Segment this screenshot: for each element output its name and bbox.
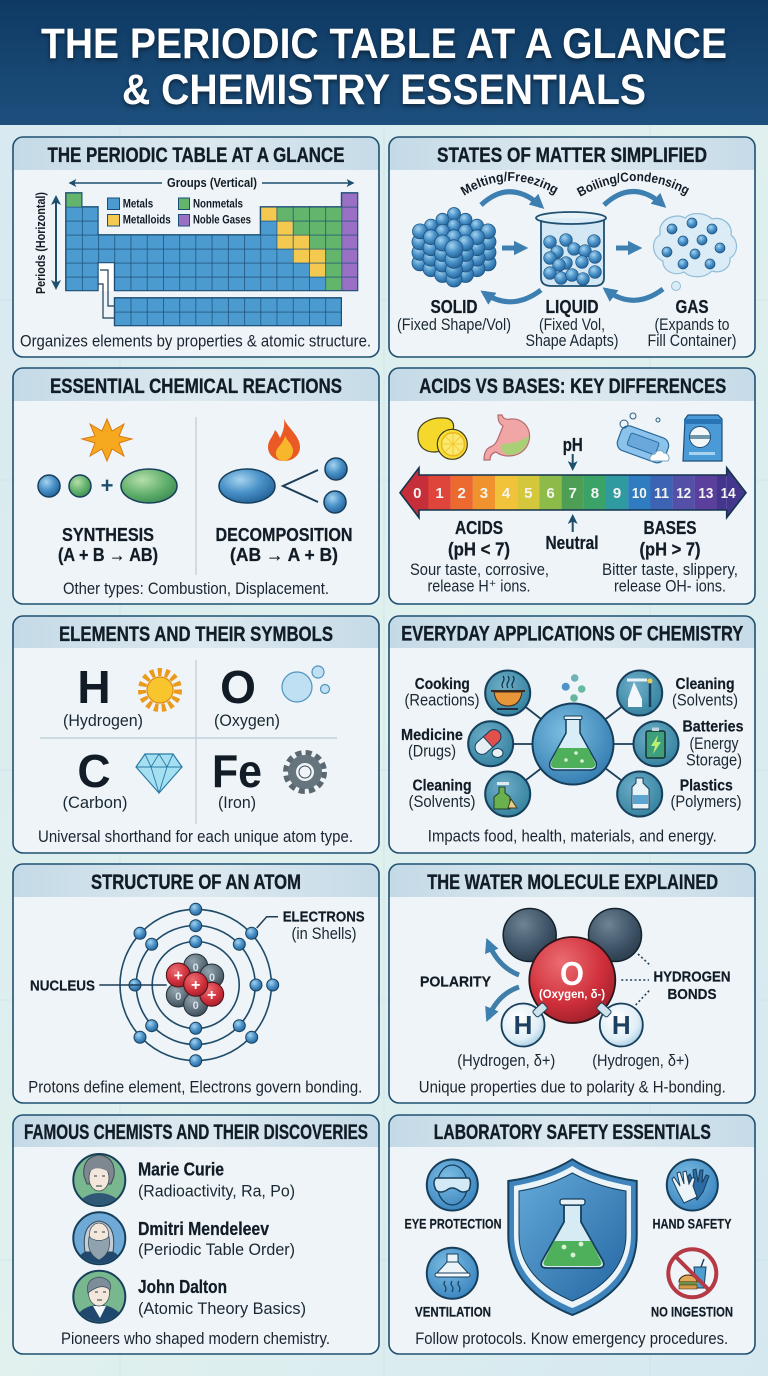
pH scale bar: 9	[613, 485, 621, 502]
left labels: Medicine	[401, 727, 463, 744]
curved process labels: Melting/Freezing	[460, 172, 558, 196]
water molecule diagram: H	[612, 1010, 631, 1040]
safety labels: VENTILATION	[415, 1304, 491, 1320]
groups axis label: Groups (Vertical)	[167, 175, 257, 190]
water molecule diagram	[502, 908, 643, 1046]
legend: Noble Gases	[193, 212, 251, 226]
synthesis label: SYNTHESIS	[62, 525, 154, 545]
acids text: (pH < 7)	[448, 540, 510, 560]
left labels: (Reactions)	[404, 692, 480, 710]
right labels: (Energy	[690, 735, 739, 753]
water molecule diagram: (Oxygen, δ-)	[539, 987, 605, 1001]
pH scale bar: 0	[413, 485, 421, 502]
icon: flame	[268, 419, 300, 461]
element: oxygen: O	[220, 661, 256, 713]
nucleus: +	[174, 968, 183, 984]
heading: STRUCTURE OF AN ATOM	[91, 871, 301, 894]
bases text: release OH- ions.	[614, 578, 726, 596]
icon: soap	[615, 413, 671, 465]
left labels: (Drugs)	[408, 743, 456, 761]
bases text: Bitter taste, slippery,	[602, 561, 738, 579]
legend: Metals	[123, 196, 153, 210]
icon: eye protection	[427, 1160, 478, 1210]
bases text: BASES	[644, 518, 696, 538]
heading: STATES OF MATTER SIMPLIFIED	[437, 144, 707, 167]
pH scale bar: 4	[502, 485, 511, 502]
nucleus: +	[207, 987, 216, 1004]
text: John Dalton: (Atomic Theory Basics)	[138, 1300, 306, 1318]
element: carbon: C	[77, 745, 111, 797]
panel: elements and symbols	[13, 616, 379, 853]
hydrogen labels	[457, 1052, 689, 1070]
hydrogen labels: (Hydrogen, δ+)	[592, 1052, 689, 1070]
icon: battery	[634, 721, 678, 766]
pH scale bar: 8	[591, 485, 599, 502]
state labels: LIQUID	[546, 297, 598, 317]
pH scale bar	[400, 468, 746, 518]
icon: cleaning flasks	[485, 772, 530, 816]
icon: lemon	[418, 418, 467, 459]
pH scale bar: 3	[480, 485, 488, 502]
nucleus: 0	[193, 962, 199, 974]
heading: ELEMENTS AND THEIR SYMBOLS	[59, 623, 333, 646]
state labels: GAS	[676, 297, 708, 317]
element: iron: Fe	[212, 745, 262, 797]
pH label and arrow: pH	[563, 435, 583, 455]
water molecule diagram: O	[560, 955, 584, 992]
state labels: (Expands to	[654, 316, 730, 334]
right labels: Plastics	[680, 778, 733, 795]
icon: medicine	[468, 721, 513, 766]
element: hydrogen	[63, 661, 143, 730]
safety labels: NO INGESTION	[651, 1304, 733, 1320]
icon: solid lattice	[412, 208, 496, 287]
icon: ventilation hood	[427, 1248, 478, 1299]
bases text	[602, 518, 738, 596]
safety labels: EYE PROTECTION	[404, 1215, 502, 1231]
right labels: Cleaning	[676, 676, 734, 693]
heading: THE PERIODIC TABLE AT A GLANCE	[48, 144, 344, 167]
state labels: (Fixed Shape/Vol)	[397, 316, 511, 334]
panel: famous chemists	[13, 1115, 379, 1354]
state labels: (Fixed Vol,	[539, 316, 605, 334]
synthesis label: (A + B → AB)	[58, 545, 158, 565]
electron shells	[120, 909, 271, 1061]
icon: beaker of liquid	[536, 212, 606, 286]
state labels	[397, 297, 736, 350]
caption: Impacts food, health, materials, and energy.	[428, 827, 717, 846]
element: hydrogen: (Hydrogen)	[63, 712, 143, 730]
periods axis label: Periods (Horizontal)	[33, 192, 48, 294]
panel: acids vs bases	[389, 368, 755, 604]
icon: sun	[142, 672, 178, 708]
element: hydrogen: H	[77, 661, 111, 713]
safety labels	[404, 1215, 733, 1320]
electrons label: ELECTRONS	[283, 909, 365, 926]
acids text: Sour taste, corrosive,	[410, 561, 549, 579]
pH scale bar: 14	[721, 485, 736, 502]
caption: Pioneers who shaped modern chemistry.	[61, 1329, 330, 1348]
curved process labels: Boiling/Condensing	[576, 172, 690, 196]
icon: oxygen bubbles	[282, 666, 330, 702]
acids text: release H⁺ ions.	[428, 578, 530, 596]
synthesis label	[58, 525, 158, 565]
icon: plastic bottle	[617, 772, 662, 816]
caption: Protons define element, Electrons govern bonding.	[28, 1078, 362, 1097]
text: Dmitri Mendeleev: (Periodic Table Order)	[138, 1241, 295, 1259]
polarity arrows and label	[420, 942, 519, 1018]
decomposition diagram	[219, 458, 347, 513]
heading: ESSENTIAL CHEMICAL REACTIONS	[50, 375, 342, 398]
nucleus	[166, 954, 224, 1016]
acids text: ACIDS	[455, 518, 503, 538]
text: John Dalton	[138, 1277, 306, 1318]
arrows between states	[481, 192, 663, 302]
water molecule diagram: H	[514, 1010, 532, 1040]
right labels: Batteries	[682, 719, 744, 736]
text: Dmitri Mendeleev	[138, 1219, 295, 1259]
panel: structure of an atom	[13, 864, 379, 1103]
icon: gas cloud	[654, 214, 737, 290]
pH scale bar: 6	[546, 485, 555, 502]
hydrogen labels: (Hydrogen, δ+)	[457, 1052, 555, 1070]
caption: Organizes elements by properties & atomic structure.	[20, 332, 371, 350]
periods axis label	[33, 192, 56, 294]
pH label and arrow	[563, 435, 583, 469]
nucleus: +	[191, 977, 200, 994]
panel: laboratory safety	[389, 1115, 755, 1354]
pH scale bar: 10	[632, 485, 647, 502]
decomposition label	[216, 525, 352, 565]
pH scale bar: 5	[524, 485, 532, 502]
caption: Follow protocols. Know emergency procedures.	[415, 1329, 728, 1348]
element: oxygen: (Oxygen)	[214, 712, 280, 730]
caption: Unique properties due to polarity & H-bonding.	[419, 1078, 726, 1097]
element: carbon	[62, 745, 128, 812]
panel: periodic table	[13, 137, 379, 357]
left labels: (Solvents)	[408, 793, 476, 811]
left labels	[401, 676, 480, 811]
pH scale bar: 13	[698, 485, 713, 502]
rising bubbles	[562, 674, 586, 702]
portrait: Dmitri Mendeleev	[73, 1212, 126, 1265]
state labels: Fill Container)	[648, 332, 736, 350]
icon: gear	[286, 753, 324, 791]
left labels: Cooking	[415, 676, 470, 693]
bases text: (pH > 7)	[640, 540, 700, 560]
caption: Other types: Combustion, Displacement.	[63, 579, 329, 598]
icon: no ingestion	[668, 1249, 716, 1297]
right labels: (Polymers)	[670, 793, 742, 811]
text: Marie Curie	[138, 1160, 295, 1201]
pH scale bar: 7	[569, 485, 577, 502]
left labels: Cleaning	[412, 778, 472, 795]
legend	[108, 196, 251, 226]
legend: Nonmetals	[193, 196, 243, 210]
decomposition label: DECOMPOSITION	[216, 525, 352, 545]
nucleus: 0	[193, 1000, 199, 1012]
caption: Universal shorthand for each unique atom type.	[38, 827, 353, 846]
safety labels: HAND SAFETY	[652, 1215, 732, 1231]
icon: cooking pot	[485, 670, 530, 716]
right labels: Storage)	[686, 752, 742, 770]
nucleus: 0	[209, 972, 215, 984]
text: Marie Curie: Marie Curie	[138, 1160, 224, 1180]
legend: Metalloids	[123, 212, 171, 226]
icon: detergent box	[683, 415, 722, 461]
text: John Dalton: John Dalton	[138, 1277, 227, 1297]
panel: water molecule	[389, 864, 755, 1103]
electrons label	[257, 909, 365, 943]
curved process labels	[460, 172, 690, 196]
icon: diamond	[136, 754, 182, 793]
acids text	[410, 518, 549, 596]
hydrogen bonds label: HYDROGEN	[654, 969, 730, 986]
title banner	[0, 0, 768, 125]
panel: states of matter	[388, 136, 756, 358]
state labels: SOLID	[430, 297, 478, 317]
panel: chemical reactions	[13, 368, 379, 604]
icon: starburst	[82, 419, 132, 461]
polarity arrows and label: POLARITY	[420, 974, 491, 991]
decomposition label: (AB → A + B)	[230, 545, 338, 565]
heading: FAMOUS CHEMISTS AND THEIR DISCOVERIES	[24, 1121, 368, 1144]
neutral label and arrow	[546, 516, 598, 553]
electrons label: (in Shells)	[292, 925, 356, 943]
pH scale bar: 2	[458, 485, 466, 502]
state labels: Shape Adapts)	[526, 332, 618, 350]
electrons	[129, 903, 279, 1067]
synthesis diagram	[38, 469, 177, 503]
right labels	[670, 676, 744, 811]
element: carbon: (Carbon)	[62, 794, 128, 812]
periodic table grid	[66, 193, 358, 326]
portrait: Marie Curie	[73, 1154, 125, 1206]
text: Dmitri Mendeleev: Dmitri Mendeleev	[138, 1219, 269, 1239]
title banner: & CHEMISTRY ESSENTIALS	[122, 66, 646, 114]
portrait: John Dalton	[73, 1271, 126, 1323]
element: iron: (Iron)	[218, 794, 256, 812]
right labels: (Solvents)	[672, 692, 738, 710]
pH scale bar: 1	[435, 485, 444, 502]
icon: central flask	[532, 704, 614, 784]
panel: everyday applications	[389, 616, 755, 853]
nucleus: 0	[175, 991, 181, 1003]
icon: shield with flask	[508, 1159, 637, 1315]
text: Marie Curie: (Radioactivity, Ra, Po)	[138, 1183, 295, 1201]
element: oxygen	[214, 661, 280, 730]
icon: gloves	[667, 1160, 718, 1210]
neutral label and arrow: Neutral	[546, 533, 598, 553]
synthesis diagram: +	[101, 473, 113, 498]
nucleus label: NUCLEUS	[30, 978, 95, 995]
nucleus label	[30, 978, 167, 995]
hydrogen bonds label: BONDS	[668, 986, 716, 1003]
pH scale bar: 12	[676, 485, 691, 502]
icon: stomach	[484, 415, 530, 460]
hydrogen bonds label	[621, 954, 730, 1005]
pH scale bar: 11	[654, 485, 669, 502]
icon: spray cleaner	[617, 670, 662, 716]
